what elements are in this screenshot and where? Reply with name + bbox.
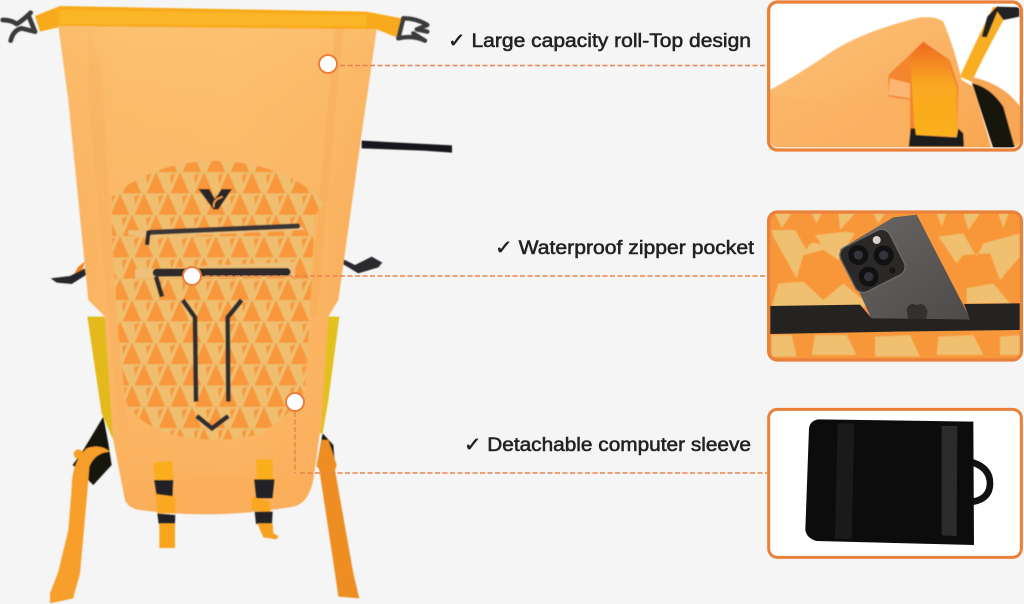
leader line xyxy=(340,64,767,66)
pocket photo xyxy=(770,213,1020,357)
leader line xyxy=(205,275,767,277)
panel background xyxy=(769,2,1021,150)
marker dot xyxy=(286,393,304,411)
logo xyxy=(198,189,232,209)
panel border xyxy=(769,212,1021,360)
lower zipper xyxy=(135,262,295,297)
sleeve strap right xyxy=(942,426,957,536)
leader line xyxy=(295,412,767,473)
panel background xyxy=(769,212,1021,360)
side pocket: left yellow xyxy=(87,317,113,440)
side buckle left xyxy=(51,262,86,284)
black shoulder pad right xyxy=(317,433,335,467)
roll-top photo xyxy=(770,7,1020,148)
panel border xyxy=(769,2,1021,150)
label: ✓ Large capacity roll-Top design xyxy=(448,30,751,52)
roll-top strip xyxy=(35,6,402,39)
panel: roll-top detail xyxy=(769,2,1021,150)
side pocket: right yellow xyxy=(315,317,339,433)
bottom buckle right xyxy=(252,459,278,539)
label: ✓ Waterproof zipper pocket xyxy=(495,237,755,259)
bottom buckle left xyxy=(153,461,175,548)
marker dot xyxy=(183,267,201,285)
bag body xyxy=(58,26,377,514)
sleeve body xyxy=(805,419,974,545)
patterned front panel xyxy=(107,157,330,450)
buckle right xyxy=(398,18,427,41)
upper zipper xyxy=(128,225,305,245)
callout: waterproof zipper pocket xyxy=(183,237,767,285)
callout: detachable computer sleeve xyxy=(286,393,767,473)
label: ✓ Detachable computer sleeve xyxy=(464,434,751,456)
compression strap right xyxy=(362,141,452,153)
panel: computer sleeve detail xyxy=(769,409,1021,557)
phone xyxy=(837,215,971,319)
black shoulder pad left xyxy=(73,417,112,485)
shoulder strap left xyxy=(50,446,110,603)
shoulder strap right xyxy=(317,440,359,598)
sleeve strap left xyxy=(835,423,854,539)
panel background xyxy=(769,409,1021,557)
reflective Y lines xyxy=(183,300,242,428)
callout: large capacity roll-top xyxy=(319,30,767,73)
buckle left xyxy=(3,13,35,41)
black zipper band xyxy=(770,303,1020,334)
marker dot xyxy=(319,55,337,73)
fabric pattern xyxy=(772,213,1020,357)
side buckle right xyxy=(342,257,382,273)
backpack product illustration xyxy=(3,6,452,603)
panel: zipper pocket detail xyxy=(769,212,1021,360)
sleeve handle xyxy=(960,463,990,502)
